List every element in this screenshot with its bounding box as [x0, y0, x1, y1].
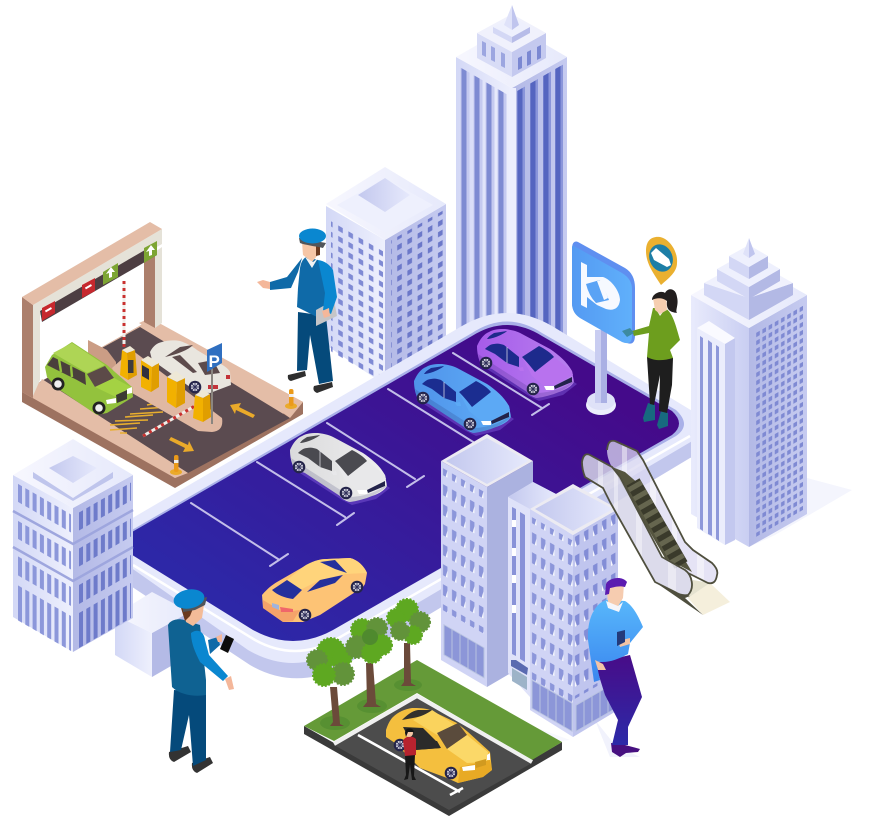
person: officer with phone [168, 587, 234, 773]
middle building [508, 482, 556, 715]
officer hand [257, 280, 270, 289]
gate frame [22, 222, 162, 398]
officer arm and phone hand [208, 637, 220, 654]
deck rim side [93, 333, 706, 678]
purple parking surface [113, 325, 679, 641]
island [112, 350, 222, 432]
woman collar [654, 306, 666, 316]
escalator [582, 435, 730, 615]
bollard left [170, 455, 182, 475]
man trousers [595, 655, 642, 745]
vertical barrier arm [122, 281, 126, 347]
green sign right [144, 241, 157, 263]
parking p sign [207, 343, 222, 424]
green suv [45, 342, 133, 415]
right glass panel [607, 435, 717, 595]
tower: right stepped skyscraper [691, 238, 807, 547]
bollard right [285, 389, 297, 409]
officer shoes [169, 746, 213, 773]
door canopy [512, 668, 527, 690]
sign panel [572, 242, 635, 344]
officer face [302, 242, 318, 262]
green sign left [103, 263, 118, 285]
lot edge [304, 726, 562, 816]
plaza base [22, 320, 303, 488]
man hair [605, 578, 627, 595]
officer extended arm [270, 258, 302, 290]
icon: location pin with car [645, 237, 677, 285]
plaza left sidewalk [38, 379, 188, 478]
officer hair [316, 244, 320, 256]
tower: left columned block [13, 439, 133, 652]
hazard hatch [110, 403, 167, 433]
woman shoes [643, 403, 668, 429]
sign logo [581, 262, 620, 310]
escalator steps [633, 482, 681, 565]
person: woman in green [622, 289, 680, 429]
tier seams [13, 510, 133, 581]
woman sweater [632, 308, 680, 360]
escalator skirt [612, 467, 692, 572]
person: officer with clipboard [257, 228, 337, 393]
deck rim top [93, 313, 703, 663]
person: man in blue sweater [588, 578, 643, 757]
sign post [595, 330, 607, 403]
kiosk 1 [120, 346, 137, 380]
boom barrier [143, 399, 207, 436]
red sign left [42, 301, 55, 321]
bay lines [191, 353, 549, 566]
sign base [586, 395, 616, 415]
toll plaza [22, 222, 303, 488]
white car in plaza [150, 340, 231, 393]
man sweater [588, 600, 643, 682]
person: woman in red [403, 728, 416, 780]
escalator shadow [688, 580, 710, 598]
woman trousers [647, 357, 673, 413]
kiosk 2 [141, 356, 159, 392]
red sign right [82, 278, 95, 298]
plaza right sidewalk [139, 318, 303, 418]
parking p sign: P [208, 352, 220, 371]
towers: front apartment buildings [441, 434, 618, 737]
tall building [441, 461, 487, 687]
sign: parking totem [572, 242, 635, 415]
phone [220, 635, 234, 653]
open car door [414, 748, 442, 768]
escalator floor landing [688, 583, 730, 615]
kiosk 3 [167, 371, 185, 408]
officer trousers [297, 312, 333, 384]
officer shoes [288, 371, 333, 393]
officer clipboard [316, 300, 337, 326]
storefront [532, 680, 572, 731]
tree 3 [387, 599, 430, 691]
woman hand and phone [622, 328, 634, 337]
man shoes [611, 743, 640, 757]
officer jacket [297, 257, 330, 318]
deck white stripe [133, 436, 690, 651]
car: grey sedan [290, 433, 390, 505]
arrow: outbound [169, 437, 194, 452]
kiosk 4 [193, 390, 211, 422]
car: purple sedan [477, 329, 577, 401]
woman face [653, 296, 667, 314]
lot border [334, 696, 532, 762]
car: orange hatchback [262, 558, 367, 622]
man phone [617, 630, 625, 646]
officer cap [299, 238, 326, 248]
box: low cube [115, 592, 190, 677]
officer trousers [170, 690, 206, 766]
officer cap [183, 597, 207, 612]
officer shirt [305, 257, 318, 268]
man collar [606, 601, 623, 612]
car: yellow with open door [386, 708, 492, 783]
lot bay line [358, 735, 463, 795]
parking deck [93, 313, 706, 678]
island wall [88, 340, 116, 372]
woman hair [652, 289, 678, 313]
tall building storefront [444, 625, 484, 678]
officer head [183, 605, 204, 626]
car: blue sedan [414, 364, 514, 436]
lawn [304, 660, 562, 760]
man head [606, 583, 624, 608]
plaza floor [22, 320, 303, 478]
parking lot with lawn [304, 660, 562, 816]
man hand [595, 660, 606, 670]
tree 2 [346, 618, 392, 713]
arrow: inbound [230, 403, 255, 418]
ground shadows [380, 478, 852, 757]
tower: tall skyscraper [456, 5, 567, 384]
escalator underside [655, 582, 703, 615]
right tower slab [697, 321, 735, 545]
officer jacket [168, 619, 206, 696]
asphalt [334, 697, 532, 810]
deck inner edge [113, 322, 684, 640]
left glass panel [582, 450, 692, 600]
officer sleeve [318, 260, 337, 314]
plaza asphalt [40, 327, 290, 473]
front-right building [530, 509, 573, 737]
tree 1 [307, 638, 354, 730]
tower: mid windowed block [326, 167, 446, 385]
